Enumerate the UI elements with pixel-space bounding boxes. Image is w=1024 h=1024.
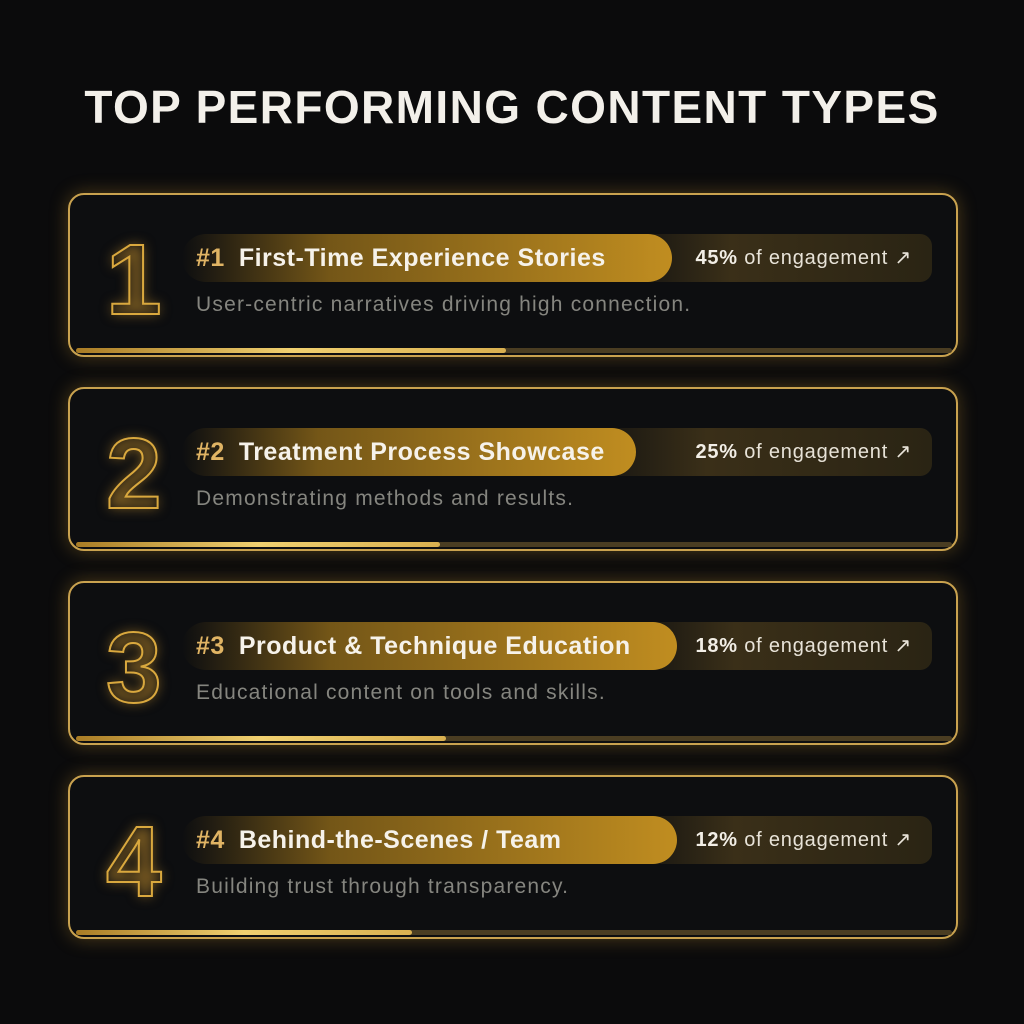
progress bar (76, 348, 952, 353)
heading: #4 Behind-the-Scenes / Team (196, 826, 562, 854)
stat pill (650, 622, 932, 670)
progress bar (76, 930, 952, 935)
stat pill (610, 428, 932, 476)
panel: card 2 (68, 387, 958, 551)
panel: card 1 (68, 193, 958, 357)
stat pill: 12% of engagement ↗ (695, 829, 912, 851)
title band (182, 428, 636, 476)
description: Educational content on tools and skills. (196, 681, 606, 704)
heading: #1 First-Time Experience Stories (196, 244, 606, 272)
stat pill: 25% of engagement ↗ (695, 441, 912, 463)
heading: #3 Product & Technique Education (196, 632, 631, 660)
progress bar (76, 736, 952, 741)
description: Demonstrating methods and results. (196, 487, 574, 510)
description: Building trust through transparency. (196, 875, 569, 898)
heading: #2 Treatment Process Showcase (196, 438, 605, 466)
title band (182, 622, 677, 670)
panel: card 4 (68, 775, 958, 939)
panel: card 3 (68, 581, 958, 745)
title band (182, 234, 672, 282)
description: User-centric narratives driving high connection. (196, 293, 691, 316)
title: TOP PERFORMING CONTENT TYPES (84, 81, 940, 133)
title band (182, 816, 677, 864)
stat pill (650, 816, 932, 864)
stat pill (644, 234, 932, 282)
progress bar (76, 542, 952, 547)
stat pill: 18% of engagement ↗ (695, 635, 912, 657)
stat pill: 45% of engagement ↗ (695, 247, 912, 269)
